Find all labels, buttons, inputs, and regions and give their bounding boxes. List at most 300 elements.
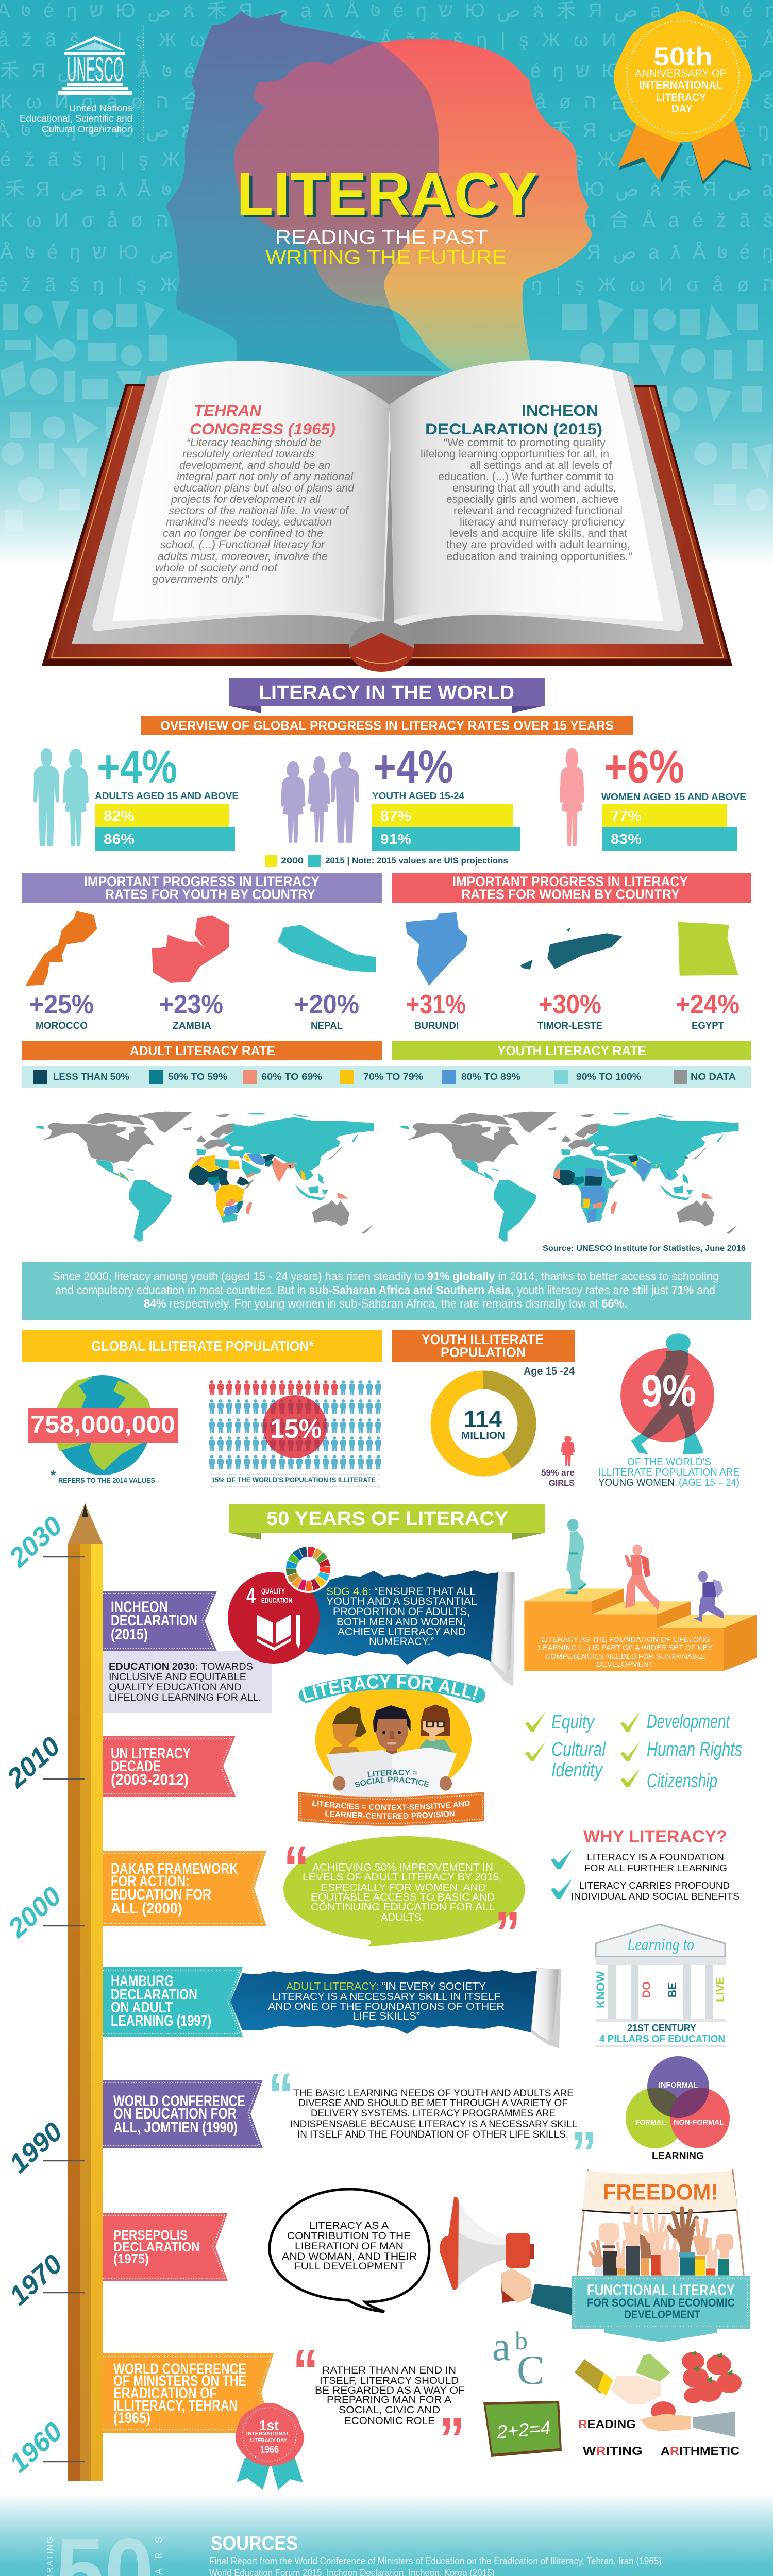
year labels: 2010 (1, 1731, 66, 1794)
diagram: learning venn: NON-FORMAL (674, 2118, 724, 2127)
country stats: +31% (406, 990, 466, 1020)
country stats: EGYPT (692, 1021, 724, 1031)
text: organisation name: Cultural Organization (42, 124, 132, 134)
illustration: literacy for all (298, 1674, 485, 1826)
panel header: youth progress: RATES FOR YOUTH BY COUNTRY (105, 887, 315, 902)
icon: apples (682, 2352, 742, 2403)
flag: World Conference Jomtien: ALL, JOMTIEN (1990) (113, 2119, 238, 2136)
sources list: SOURCES (211, 2533, 298, 2554)
panel: Education 2030 (103, 1651, 272, 1713)
badge: SDG 4 quality education: QUALITY (261, 1587, 285, 1595)
flag: World Conference Tehran (103, 2353, 274, 2433)
year labels: 1960 (4, 2416, 68, 2479)
country stats: MOROCCO (36, 1021, 88, 1031)
highlight circle (263, 1395, 327, 1458)
banner: adult literacy quote: LITERACY IS A NECESSARY SKILL IN ITSELF (272, 1991, 500, 2003)
chart: young women 9 percent (598, 1333, 740, 1488)
panel: why literacy (551, 1827, 740, 1902)
caption (211, 1475, 380, 1486)
book right page text: all settings and at all levels of (470, 460, 612, 471)
quote: rather than an end: “ (293, 2337, 318, 2405)
book spine knob (349, 621, 414, 672)
banner: literacies: LEARNER-CENTERED PROVISION (325, 1810, 455, 1819)
speech bubble: Dakar quote: ESPECIALLY FOR WOMEN, AND (321, 1882, 486, 1893)
speech bubble: liberation: LIBERATION OF MAN (295, 2241, 404, 2252)
book (42, 360, 732, 672)
flag: Dakar Framework: EDUCATION FOR (111, 1886, 211, 1903)
quote marks (283, 1834, 520, 1967)
flag: Hamburg Declaration: ON ADULT (111, 1999, 173, 2016)
background pattern: world alphabets (0, 0, 773, 296)
flag: Hamburg Declaration: DECLARATION (111, 1986, 197, 2003)
book left page text: integral part not only of any national (177, 471, 354, 483)
flag: World Conference Jomtien: ON EDUCATION FOR (113, 2105, 237, 2122)
book left page text: education plans but also of plans and (174, 482, 355, 494)
badge: SDG 4 quality education (228, 1572, 320, 1664)
icon: youth silhouettes (281, 752, 359, 843)
icon: girl (561, 1436, 575, 1466)
text: UNESCO (67, 50, 124, 89)
badge: first literacy day 1966: 1966 (260, 2444, 279, 2455)
panel: why literacy: LITERACY IS A FOUNDATION (587, 1852, 724, 1862)
book left page text: governments only." (152, 573, 250, 585)
banner: adult literacy quote: ADULT LITERACY: “IN EVERY SOCIETY (286, 1981, 486, 1992)
number band: 758,000,000 (30, 1411, 175, 1438)
text: reading writing arithmetic (578, 2417, 740, 2458)
book left page text: adults must, moreover, involve the (158, 551, 328, 563)
book right page text: literacy and numeracy proficiency (460, 516, 625, 528)
text: organisation name: Educational, Scientific and (20, 113, 132, 124)
icon: open book (326, 1748, 457, 1797)
icon: steps (524, 1588, 757, 1671)
book left page text: development, and should be an (179, 460, 330, 471)
checklist: values: Identity (551, 1759, 603, 1781)
panel header: youth illiterate population (392, 1330, 575, 1362)
icon: poles (577, 2169, 744, 2276)
panel header: youth literacy rate: YOUTH LITERACY RATE (497, 1044, 646, 1058)
legend: years: 2000 (281, 856, 304, 866)
caption: 15% OF THE WORLD'S POPULATION IS ILLITERATE (211, 1476, 376, 1484)
text: seal wording: INTERNATIONAL (639, 79, 722, 91)
panel: functional literacy: FUNCTIONAL LITERACY (587, 2282, 735, 2299)
text: seal wording: ANNIVERSARY OF (635, 67, 726, 79)
sources list: Final Report from the World Conference of Ministers of Education on the Eradication of Illiteracy, Tehran, Iran (1965) (209, 2556, 662, 2566)
checklist: values: Development (647, 1711, 730, 1733)
panel: women stat: +6% (604, 741, 684, 793)
chart: youth illiterate donut: GIRLS (549, 1478, 575, 1488)
subtitle: WRITING THE FUTURE (265, 247, 507, 268)
chart: youth illiterate donut (440, 1366, 575, 1488)
quote: rather than an end: RATHER THAN AN END IN (322, 2365, 456, 2376)
icon: abc letters (492, 2324, 544, 2393)
book left page text: mankind's needs today, education (166, 516, 332, 528)
badge: SDG 4 quality education: 4 (246, 1583, 256, 1608)
panel: why literacy: WHY LITERACY? (583, 1827, 727, 1846)
book left page text: can no longer be confined to the (163, 528, 323, 539)
icon: girl reader (329, 1706, 367, 1755)
text: reading writing arithmetic: READING (578, 2417, 636, 2431)
background pattern: world alphabets: 禾 Я ص a ƛ Å ७ é ŋ ש Ю ص ጰ 禾 Я ص a ƛ Å ७ é ŋ ש Ю ص ጰ 禾 Я ص a (5, 178, 773, 201)
footer panel (0, 2494, 773, 2576)
checklist: values: Human Rights (647, 1739, 742, 1760)
map: Nepal (278, 925, 376, 972)
icon: temple (58, 36, 132, 95)
legend: literacy rate bands: 50% TO 59% (168, 1072, 227, 1082)
book cover (42, 384, 732, 666)
heading: literacy in the world (229, 678, 545, 713)
panel: adults stat: ADULTS AGED 15 AND ABOVE (95, 791, 239, 801)
flag: Incheon Declaration: DECLARATION (111, 1612, 197, 1629)
panel: functional literacy: DEVELOPMENT (624, 2308, 700, 2321)
icon: woman silhouette (560, 748, 584, 846)
quote marks: ” (495, 1899, 520, 1967)
icon: raised hands (590, 2208, 733, 2276)
illustration: money, apples and hand (575, 2351, 742, 2458)
panel header: youth progress (22, 873, 382, 903)
speech bubble: Dakar quote: ACHIEVING 50% IMPROVEMENT IN (312, 1862, 493, 1873)
quote: rather than an end (293, 2337, 465, 2473)
text: SDG quote: SDG 4.6: “ENSURE THAT ALL (326, 1586, 476, 1598)
icon: open book: SOCIAL PRACTICE (355, 1776, 429, 1788)
checklist: values: Cultural (551, 1739, 606, 1760)
book left page text: projects for development in all (171, 494, 321, 505)
book page block (72, 376, 704, 644)
banner: literacies (298, 1792, 484, 1826)
book left page text: school. (...) Functional literacy for (160, 539, 325, 551)
legend: literacy rate bands: 60% TO 69% (261, 1072, 322, 1082)
bar: youth 2000 (372, 804, 513, 827)
text: SDG quote (326, 1586, 477, 1648)
text: seal wording (635, 42, 726, 115)
country stats: +25% (29, 990, 94, 1020)
quote: rather than an end: BE REGARDED AS A WAY OF (315, 2385, 465, 2396)
text: SDG quote: BOTH MEN AND WOMEN, (337, 1616, 466, 1628)
country stats: ZAMBIA (173, 1021, 211, 1031)
chart: young women 9 percent: ILLITERATE POPULATION ARE (598, 1467, 740, 1478)
quote: rather than an end: ” (439, 2405, 465, 2473)
pillar labels: KNOW (594, 1971, 607, 2008)
legend: literacy rate bands: LESS THAN 50% (53, 1072, 129, 1082)
chart: young women 9 percent: 9% (641, 1365, 696, 1416)
icon: open book: LITERACY = (367, 1770, 417, 1777)
country stats: +23% (159, 990, 223, 1020)
text: foundation of lifelong learning: COMPETENCIES NEEDED FOR SUSTAINABLE (545, 1652, 706, 1661)
logo: UNESCO (20, 36, 132, 134)
panel: adults stat: +4% (97, 741, 177, 793)
icon: yellow disc (315, 1683, 472, 1797)
bar: women 2015 (602, 827, 737, 851)
heading: literacy in the world: LITERACY IN THE WORLD (259, 682, 514, 704)
chart: youth illiterate donut: Age 15 -24 (524, 1366, 575, 1377)
panel header: youth illiterate population: POPULATION (441, 1345, 526, 1360)
legend: literacy rate bands: 70% TO 79% (363, 1072, 423, 1082)
flag: World Conference Tehran: (1965) (113, 2410, 150, 2427)
flag: World Conference Jomtien (103, 2080, 263, 2148)
checklist: values: Citizenship (647, 1770, 717, 1792)
icon: money hand (575, 2354, 670, 2404)
year labels (1, 1511, 68, 2479)
icon: chalkboard: 2+2=4 (495, 2417, 551, 2443)
legend: literacy rate bands: 80% TO 89% (461, 1072, 520, 1082)
country stats: TIMOR-LESTE (537, 1021, 602, 1031)
flag: World Conference Tehran: ILLITERACY, TEHRAN (113, 2397, 238, 2414)
country stats: BURUNDI (414, 1021, 459, 1031)
banner: adult literacy quote: LIFE SKILLS” (353, 2011, 420, 2022)
map: world adult literacy (35, 1112, 374, 1242)
diagram: four pillars temple: Learning to (627, 1935, 694, 1954)
country stats: +20% (294, 990, 359, 1020)
quote: basic learning needs: ” (571, 2119, 597, 2187)
badge: first literacy day 1966: 1st (259, 2417, 279, 2433)
book right page text: education and training opportunities." (446, 551, 632, 563)
quote: basic learning needs: THE BASIC LEARNING NEEDS OF YOUTH AND ADULTS ARE (293, 2088, 574, 2099)
checklist: values (525, 1711, 742, 1792)
panel header: women progress: RATES FOR WOMEN BY COUNTRY (461, 887, 680, 902)
heading arc: LITERACY FOR ALL! (301, 1675, 478, 1701)
background pattern: world alphabets: Å ७ é ŋ ש Ю ص ጰ 禾 Я ص a ƛ Å ७ é ŋ ש Ю ص ጰ 禾 Я ص a ƛ Å ७ é ŋ (0, 118, 769, 142)
flag: Dakar Framework: FOR ACTION: (111, 1873, 190, 1890)
icon: purple walker (694, 1571, 724, 1622)
text: SDG quote: PROPORTION OF ADULTS, (333, 1606, 470, 1618)
panel header: adult literacy rate (22, 1041, 382, 1060)
icon: ribbon tails (619, 123, 752, 184)
bar: adults 2000: 82% (104, 808, 135, 824)
year labels: 1970 (4, 2249, 68, 2311)
panel header: youth progress: IMPORTANT PROGRESS IN LITERACY (84, 874, 320, 889)
subheading: global progress: OVERVIEW OF GLOBAL PROGRESS IN LITERACY RATES OVER 15 YEARS (160, 719, 614, 733)
banner: adult literacy quote (230, 1968, 561, 2048)
bar: women 2000: 77% (611, 808, 642, 824)
legend: years: 2015 | Note: 2015 values are UIS projections (325, 856, 508, 866)
panel: Education 2030: QUALITY EDUCATION AND (109, 1682, 242, 1693)
icon: red walker (625, 1544, 660, 1611)
text: organisation name: United Nations (69, 103, 132, 113)
icon: walking woman (631, 1333, 703, 1454)
book right page text: especially girls and women, achieve (446, 494, 619, 505)
flag: Hamburg Declaration (103, 1967, 243, 2037)
map: Timor-Leste (520, 928, 623, 970)
diagram: learning venn (626, 2056, 730, 2162)
icon: green checks (525, 1711, 640, 1787)
badge: 50th anniversary (614, 11, 752, 184)
speech bubble: Dakar quote: EQUITABLE ACCESS TO BASIC AND (311, 1892, 495, 1903)
flag: UN Literacy Decade: UN LITERACY (111, 1745, 191, 1762)
book left page text: whole of society and not (155, 562, 278, 574)
pillar labels (594, 1971, 727, 2008)
book right page text: they are provided with adult learning, (446, 539, 630, 551)
footnote (51, 1467, 155, 1484)
title: LITERACY (240, 163, 541, 231)
speech bubble: Dakar quote (283, 1834, 525, 1967)
badge: first literacy day 1966: INTERNATIONAL (246, 2431, 290, 2437)
panel header: youth literacy rate (392, 1041, 751, 1060)
text: SDG quote: YOUTH AND A SUBSTANTIAL (326, 1596, 477, 1607)
panel header: women progress: IMPORTANT PROGRESS IN LITERACY (452, 874, 688, 889)
panel: adults stat (33, 741, 239, 851)
callout: youth literacy text: 84% respectively. For young women in sub-Saharan Africa, the rate remains dismally low at 66%. (144, 1297, 627, 1310)
speech bubble: Dakar quote: LEVELS OF ADULT LITERACY BY 2015, (303, 1872, 502, 1883)
quote: rather than an end: PREPARING MAN FOR A (327, 2395, 451, 2405)
icon: adults silhouettes (33, 748, 89, 846)
illustration: freedom banner and hands (577, 2169, 744, 2276)
source note: Source: UNESCO Institute for Statistics, June 2016 (543, 1244, 746, 1253)
background pattern: world alphabets: 禾 Я ص a ƛ Å ७ é ŋ ש Ю ص ጰ 禾 Я ص a ƛ Å ७ é ŋ ש Ю ص ጰ 禾 Я ص (0, 59, 773, 82)
flag: Hamburg Declaration: LEARNING (1997) (111, 2012, 211, 2029)
map: Egypt (678, 922, 738, 976)
chart: youth illiterate donut: MILLION (461, 1430, 505, 1442)
legend: literacy rate bands: NO DATA (691, 1072, 736, 1082)
bar: adults 2015 (95, 827, 235, 851)
background pattern: school icons (0, 299, 773, 531)
background pattern: world alphabets: å ž ã š ŋ | ş Ж ω И σ å ø ה 合 Å ž ã š ŋ | ş Ж ω И σ å ø ה 合 Å (0, 28, 773, 51)
flag: World Conference Jomtien: WORLD CONFERENCE (113, 2093, 245, 2110)
subtitle: READING THE PAST (275, 227, 488, 248)
panel: functional literacy: FOR SOCIAL AND ECONOMIC (587, 2296, 735, 2309)
panel: Education 2030: INCLUSIVE AND EQUITABLE (109, 1672, 246, 1683)
icon: gold seal (614, 11, 752, 142)
flag: Dakar Framework (103, 1851, 266, 1926)
flag: Hamburg Declaration: HAMBURG (111, 1973, 174, 1990)
book left page text: resolutely oriented towards (182, 448, 315, 460)
speech bubble: Dakar quote: ADULTS. (381, 1912, 424, 1923)
map: Zambia (152, 915, 229, 983)
text: foundation of lifelong learning: LEARNING (...) IS PART OF A WIDER SET OF KEY (539, 1643, 713, 1652)
heading: 50 years of literacy: 50 YEARS OF LITERACY (266, 1508, 508, 1530)
silhouette: boy head (165, 11, 443, 371)
flag: Persepolis Declaration: (1975) (113, 2251, 149, 2266)
flag: World Conference Tehran: OF MINISTERS ON THE (113, 2372, 246, 2389)
map: Morocco (26, 911, 97, 986)
icon: chalkboard (483, 2401, 562, 2457)
icon: teal walker (565, 1519, 586, 1594)
quote: basic learning needs: IN ITSELF AND THE FOUNDATION OF OTHER LIFE SKILLS. (297, 2129, 568, 2140)
year labels: 1990 (4, 2116, 68, 2179)
chart: pictogram 15 percent: 15% (270, 1414, 322, 1444)
timeline: pencil (68, 1503, 103, 2481)
figure: walkers on steps (524, 1519, 757, 1671)
quote: basic learning needs: DELIVERY SYSTEMS. LITERACY PROGRAMMES ARE (311, 2108, 556, 2119)
flag: Persepolis Declaration: PERSEPOLIS (113, 2227, 188, 2243)
country stats (29, 990, 740, 1031)
icon: abc letters: C (517, 2348, 544, 2393)
speech bubble: liberation: FULL DEVELOPMENT (294, 2261, 405, 2272)
banner: literacies: LITERACIES = CONTEXT-SENSITIVE AND (312, 1800, 470, 1810)
flag: UN Literacy Decade: (2003-2012) (111, 1771, 189, 1788)
book right page text: DECLARATION (2015) (425, 421, 602, 438)
text: foundation of lifelong learning: DEVELOPMENT. (597, 1660, 654, 1669)
flag: UN Literacy Decade (103, 1736, 236, 1797)
flag: Dakar Framework: DAKAR FRAMEWORK (111, 1860, 238, 1877)
icon: book and pencil (257, 1615, 300, 1651)
panel: why literacy: INDIVIDUAL AND SOCIAL BENEFITS (571, 1891, 740, 1902)
silhouette: girl head (234, 39, 592, 371)
background pattern: world alphabets: Å ७ é ŋ ש Ю ص ጰ 禾 Я ص a ƛ Å ७ é ŋ ש Ю ص ጰ 禾 Я ص a ƛ Å ७ é ŋ (0, 241, 773, 264)
icon: banner (582, 2171, 738, 2213)
chart: youth illiterate donut: 114 (464, 1405, 502, 1432)
legend: years (265, 855, 508, 867)
flag: Incheon Declaration (103, 1591, 217, 1651)
book left page text: sectors of the national life. In view of (169, 505, 349, 517)
book right page text: education. (...) We further commit to (438, 471, 614, 483)
quote: rather than an end: ECONOMIC ROLE (344, 2416, 435, 2427)
flag: Persepolis Declaration (103, 2213, 228, 2281)
text: SDG quote: ACHIEVE LITERACY AND (338, 1626, 466, 1638)
footnote: * (51, 1467, 56, 1483)
chart: young women 9 percent: YOUNG WOMEN (598, 1477, 675, 1488)
chart: young women 9 percent: OF THE WORLD'S (627, 1456, 711, 1468)
icon: SDG wheel (284, 1545, 332, 1593)
quote marks: “ (283, 1834, 309, 1902)
flag: Incheon Declaration: INCHEON (111, 1599, 168, 1616)
chart: youth illiterate donut: 59% are (541, 1468, 575, 1478)
book left page text: TEHRAN (194, 402, 262, 419)
badge: SDG 4 quality education: EDUCATION (261, 1596, 292, 1604)
timeline: year ticks (43, 1557, 85, 2462)
diagram: four pillars temple (594, 1924, 727, 2047)
flag: UN Literacy Decade: DECADE (111, 1758, 161, 1775)
background: top gradient (0, 0, 773, 567)
checklist: values: Equity (551, 1711, 595, 1733)
map: world youth literacy (400, 1112, 739, 1242)
text: seal wording: 50th (653, 42, 713, 71)
year labels: 2030 (3, 1511, 68, 1573)
text: seal wording: DAY (671, 103, 693, 115)
badge: first literacy day 1966 (236, 2403, 304, 2490)
diagram: learning venn: LEARNING (652, 2150, 704, 2162)
country stats: +30% (539, 990, 601, 1020)
panel: why literacy: LITERACY CARRIES PROFOUND (579, 1880, 730, 1891)
pillar labels: LIVE (714, 1977, 727, 2002)
panel: youth stat: YOUTH AGED 15-24 (372, 791, 464, 801)
title: LITERACY (237, 160, 537, 228)
background pattern: world alphabets: K ω И σ å ø ה 合 Å a é ž ã š ŋ | ş Ж ω И σ å ø ה 合 Å a é ž ã š (0, 209, 773, 231)
text: reading writing arithmetic: WRITING (583, 2444, 643, 2458)
text: foundation of lifelong learning (539, 1635, 713, 1669)
bar: women 2000 (602, 804, 727, 827)
badge: first literacy day 1966: LITERACY DAY (250, 2438, 287, 2444)
background pattern: world alphabets: K ω И σ å ø ה 合 Å a é ž ã š ŋ | ş Ж ω И σ å ø ה 合 Å a é ž ã š (0, 90, 773, 113)
callout: youth literacy text: and compulsory education in most countries. But in sub-Saharan Africa and Southern Asia, youth literacy rates are still just 71% and (55, 1283, 715, 1297)
panel: women stat: WOMEN AGED 15 AND ABOVE (601, 792, 746, 802)
callout: youth literacy text: Since 2000, literacy among youth (aged 15 - 24 years) has risen steadily to 91% globally in 2014, thanks to better access to schooling (53, 1269, 719, 1283)
icon: teal checks (551, 1850, 572, 1899)
bar: women 2015: 83% (611, 831, 642, 847)
text: organisation name (20, 103, 132, 134)
panel: Education 2030: EDUCATION 2030: TOWARDS (109, 1662, 253, 1672)
book right page text: relevant and recognized functional (453, 505, 623, 517)
book left page (92, 362, 392, 631)
flag: Persepolis Declaration: DECLARATION (113, 2239, 200, 2255)
year labels: 2000 (2, 1881, 67, 1944)
sources list (209, 2533, 690, 2576)
bar: adults 2000 (95, 804, 229, 827)
flag: Dakar Framework: ALL (2000) (111, 1900, 182, 1917)
speech bubble: Dakar quote: CONTINUING EDUCATION FOR ALL (311, 1902, 495, 1913)
background pattern: world alphabets: é ž ã š ŋ | ş Ж ω И σ å ø ה 合 Å a é ž ã š ŋ | ş Ж ω И σ å ø ה (0, 148, 773, 171)
panel: women stat (560, 741, 746, 851)
book right page text: ensuring that all youth and adults, (452, 482, 616, 494)
icon: globe (55, 1375, 150, 1475)
footnote: REFERS TO THE 2014 VALUES (58, 1476, 155, 1484)
icon: girl with glasses (420, 1704, 452, 1753)
banner: adult literacy quote: AND ONE OF THE FOUNDATIONS OF OTHER (268, 2001, 505, 2012)
panel: youth stat: +4% (373, 741, 453, 793)
diagram: four pillars temple: 4 PILLARS OF EDUCATION (599, 2033, 725, 2045)
panel header: global illiterate population: GLOBAL ILLITERATE POPULATION* (91, 1338, 314, 1354)
background pattern: world alphabets: é ž ã š ŋ | ş Ж ω И σ å ø ה 合 Å a é ž ã š ŋ | ş Ж ω И σ å ø ה (0, 273, 773, 296)
icon: abc letters: a (492, 2324, 511, 2369)
panel header: women progress (392, 873, 751, 903)
